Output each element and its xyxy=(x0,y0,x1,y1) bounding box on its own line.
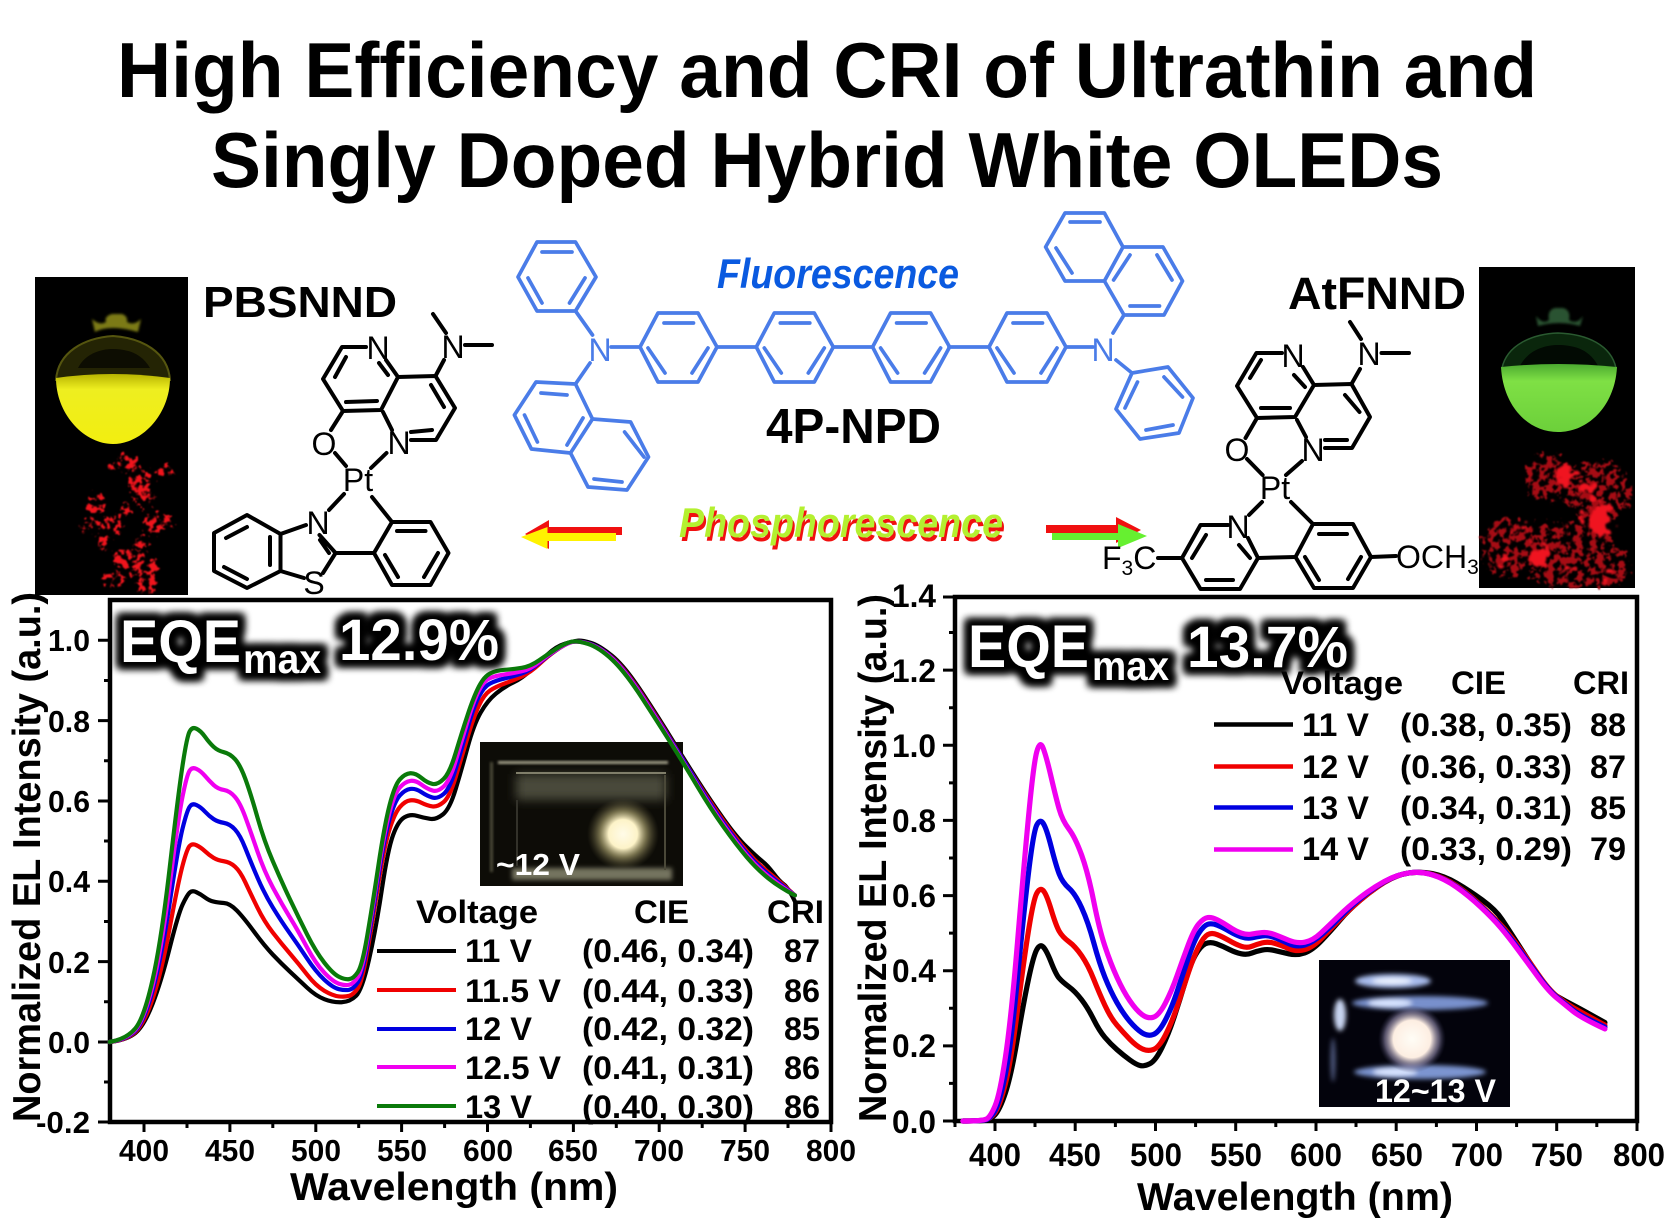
title xyxy=(117,26,1537,204)
legend: (0.42, 0.32) xyxy=(582,1011,754,1047)
axis labels: Normalized EL Intensity (a.u.) xyxy=(852,594,895,1122)
badge: EQEmax 13.7%: max xyxy=(1092,643,1169,689)
photo: device at 12 to 13 V xyxy=(1319,960,1510,1109)
badge: EQEmax 12.9%: max xyxy=(243,636,321,682)
spectra curves xyxy=(963,745,1605,1121)
axis labels: 700 xyxy=(1451,1137,1503,1173)
title: Singly Doped Hybrid White OLEDs xyxy=(211,116,1443,204)
legend: 11 V xyxy=(1302,707,1370,743)
axis labels: 650 xyxy=(548,1133,598,1168)
label: PBSNND: PBSNND xyxy=(203,278,397,327)
axis labels: 0.6 xyxy=(892,878,936,914)
legend xyxy=(377,894,824,1125)
badge: EQEmax 12.9% xyxy=(120,608,499,682)
axis labels: 400 xyxy=(969,1137,1021,1173)
legend: (0.40, 0.30) xyxy=(582,1089,754,1125)
axis labels: 1.0 xyxy=(48,623,90,658)
axis labels: 800 xyxy=(1613,1137,1665,1173)
legend: (0.36, 0.33) xyxy=(1400,749,1572,785)
legend: 11.5 V xyxy=(465,973,562,1009)
legend: 87 xyxy=(784,933,820,969)
molecule: 4P-NPD xyxy=(514,213,1193,490)
molecule: 4P-NPD: N xyxy=(1091,332,1115,368)
legend: 14 V xyxy=(1302,831,1370,867)
legend: 79 xyxy=(1590,831,1626,867)
molecule: PBSNND: N xyxy=(387,425,411,461)
axis labels: 400 xyxy=(119,1133,169,1168)
molecule: PBSNND: N xyxy=(306,505,330,541)
title: High Efficiency and CRI of Ultrathin and xyxy=(117,26,1537,114)
legend: 13 V xyxy=(465,1089,533,1125)
badge: EQEmax 13.7%: 13.7% xyxy=(1187,615,1348,680)
legend: (0.44, 0.33) xyxy=(582,973,754,1009)
legend: 12.5 V xyxy=(465,1050,562,1086)
axis labels xyxy=(6,592,856,1209)
legend: Voltage xyxy=(416,894,538,930)
molecule: AtFNND: C xyxy=(1133,540,1156,576)
badge: EQEmax 13.7%: EQE xyxy=(968,613,1089,680)
photo: AtFNND green flask and red crystals xyxy=(1479,267,1635,588)
axis labels: 0.0 xyxy=(48,1025,90,1060)
axis labels: 550 xyxy=(1210,1137,1262,1173)
legend: (0.41, 0.31) xyxy=(582,1050,754,1086)
legend: 12 V xyxy=(465,1011,533,1047)
legend: CRI xyxy=(1573,665,1629,701)
legend: CIE xyxy=(1451,665,1506,701)
molecule: AtFNND: O xyxy=(1225,432,1249,468)
axis labels: -0.2 xyxy=(36,1105,90,1140)
axis labels: 600 xyxy=(1290,1137,1342,1173)
axis labels: 0.4 xyxy=(892,953,936,989)
axis labels: 800 xyxy=(806,1133,856,1168)
axis labels: 600 xyxy=(463,1133,513,1168)
photo: device at about 12 V: ~12 V xyxy=(496,847,580,882)
molecule: AtFNND: N xyxy=(1281,338,1305,374)
molecule: AtFNND: F xyxy=(1102,540,1122,576)
legend: 86 xyxy=(784,1089,820,1125)
axis labels: 0.6 xyxy=(48,784,90,819)
axis labels: 0.8 xyxy=(48,704,90,739)
axis labels: 500 xyxy=(1130,1137,1182,1173)
legend: 11 V xyxy=(465,933,533,969)
legend: CRI xyxy=(767,894,824,930)
photo: PBSNND yellow flask and red crystals xyxy=(35,277,188,595)
molecule: AtFNND: Pt xyxy=(1260,470,1290,506)
label: 4P-NPD: 4P-NPD xyxy=(766,400,941,454)
axis labels: 0.2 xyxy=(48,945,90,980)
axis labels: 450 xyxy=(1049,1137,1101,1173)
molecule: AtFNND: 3 xyxy=(1122,557,1133,580)
label: Fluorescence: Fluorescence xyxy=(717,250,959,297)
axis labels: Normalized EL Intensity (a.u.) xyxy=(6,592,49,1122)
legend xyxy=(1214,665,1629,867)
axis labels: Wavelength (nm) xyxy=(290,1166,618,1209)
legend: 85 xyxy=(1590,790,1626,826)
molecule: AtFNND: N xyxy=(1226,509,1250,545)
axis labels: 0.0 xyxy=(892,1104,936,1140)
axis labels: 1.4 xyxy=(892,578,936,614)
axis labels: 0.4 xyxy=(48,864,91,899)
legend: (0.33, 0.29) xyxy=(1400,831,1572,867)
molecule: PBSNND: N xyxy=(441,329,465,365)
axis labels: 1.2 xyxy=(892,653,936,689)
molecule: 4P-NPD: N xyxy=(588,332,612,368)
molecule: PBSNND: N xyxy=(366,330,390,366)
legend: 86 xyxy=(784,1050,820,1086)
legend: Voltage xyxy=(1281,665,1403,701)
molecule: PBSNND: O xyxy=(312,426,336,462)
molecule: AtFNND: OCH xyxy=(1396,539,1467,575)
badge: EQEmax 13.7% xyxy=(968,613,1348,689)
chart: AtFNND EL spectra xyxy=(852,578,1665,1219)
molecule: AtFNND: N xyxy=(1301,432,1325,468)
axis labels: 750 xyxy=(720,1133,770,1168)
molecule: AtFNND: 3 xyxy=(1467,556,1479,579)
axis labels: Wavelength (nm) xyxy=(1137,1176,1453,1219)
molecule: PBSNND: Pt xyxy=(343,462,373,498)
photo: device at about 12 V xyxy=(480,742,683,886)
plot frame and ticks xyxy=(98,600,831,1132)
axis labels: 750 xyxy=(1531,1137,1583,1173)
label: Phosphorescence: Phosphorescence xyxy=(679,499,1003,546)
axis labels: 500 xyxy=(291,1133,341,1168)
molecule: PBSNND: S xyxy=(303,565,325,601)
badge: EQEmax 12.9%: EQE xyxy=(120,608,241,675)
legend: 86 xyxy=(784,973,820,1009)
legend: 88 xyxy=(1590,707,1626,743)
label: Phosphorescence: Phosphorescence xyxy=(681,503,1005,550)
axis labels: 0.2 xyxy=(892,1028,936,1064)
molecule: AtFNND: N xyxy=(1357,336,1381,372)
axis labels: 550 xyxy=(377,1133,427,1168)
chart: PBSNND EL spectra xyxy=(6,592,856,1209)
plot frame and ticks xyxy=(943,597,1637,1131)
legend: (0.38, 0.35) xyxy=(1400,707,1572,743)
arrow: to AtFNND xyxy=(1046,517,1147,548)
legend: 13 V xyxy=(1302,790,1370,826)
axis labels: 700 xyxy=(634,1133,684,1168)
spectra curves xyxy=(110,641,795,1042)
molecule: AtFNND xyxy=(1102,322,1479,589)
axis labels: 450 xyxy=(205,1133,255,1168)
legend: CIE xyxy=(634,894,689,930)
badge: EQEmax 12.9%: 12.9% xyxy=(339,608,499,673)
label: AtFNND: AtFNND xyxy=(1288,268,1466,319)
axis labels: 1.0 xyxy=(892,728,936,764)
axis labels: 0.8 xyxy=(892,803,936,839)
legend: 12 V xyxy=(1302,749,1370,785)
axis labels: 650 xyxy=(1371,1137,1423,1173)
legend: (0.46, 0.34) xyxy=(582,933,754,969)
legend: (0.34, 0.31) xyxy=(1400,790,1572,826)
legend: 85 xyxy=(784,1011,820,1047)
molecule: PBSNND xyxy=(214,314,492,601)
arrow: to PBSNND xyxy=(521,520,622,549)
legend: 87 xyxy=(1590,749,1626,785)
photo: device at 12 to 13 V: 12~13 V xyxy=(1375,1073,1497,1109)
axis labels xyxy=(852,578,1665,1219)
